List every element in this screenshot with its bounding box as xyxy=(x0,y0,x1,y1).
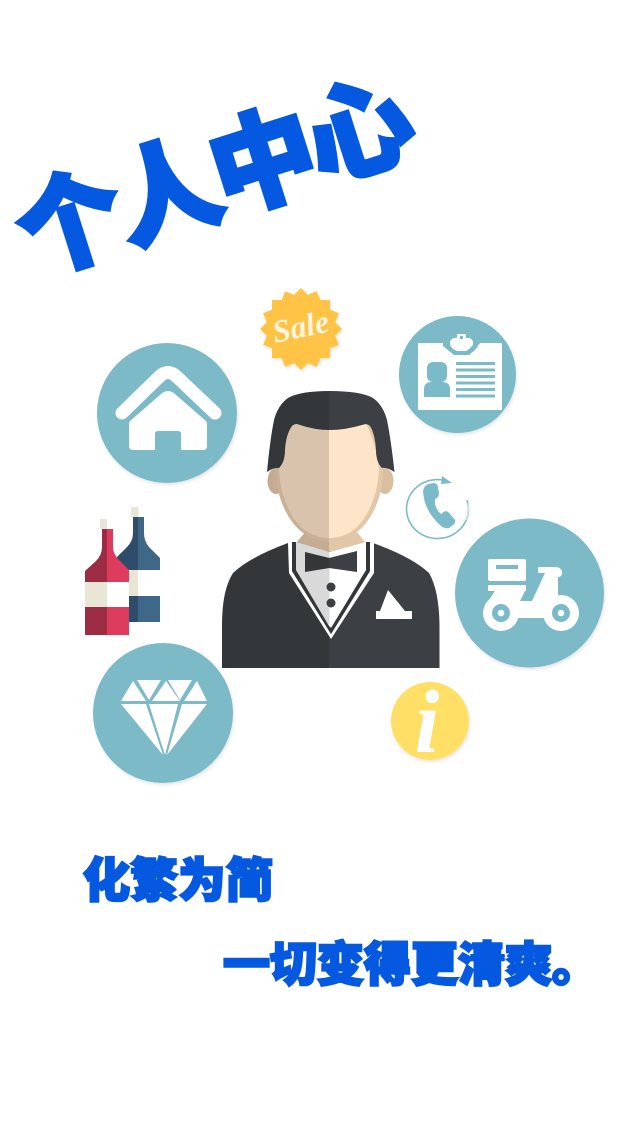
icon: home circle xyxy=(97,343,237,483)
bow tie xyxy=(305,551,357,572)
icon: id card circle xyxy=(399,316,516,433)
icon: wine bottles xyxy=(85,507,160,635)
icon: sale badge: Sale xyxy=(269,303,332,350)
icon: moped circle xyxy=(455,518,604,668)
figure: man in tuxedo xyxy=(222,391,440,668)
pocket square xyxy=(376,590,412,619)
blue bottle xyxy=(117,507,160,622)
icon: info circle: i xyxy=(414,673,440,772)
red bottle xyxy=(85,519,129,635)
shirt buttons xyxy=(326,582,336,608)
lapels and shirt xyxy=(288,542,374,639)
hair xyxy=(267,391,394,472)
icon: diamond circle xyxy=(93,643,233,783)
icon: info circle xyxy=(391,673,469,772)
ears xyxy=(268,468,394,494)
face xyxy=(276,425,383,541)
icon: sale badge xyxy=(260,288,342,370)
tagline line 1: 化繁为简 xyxy=(83,854,273,907)
jacket xyxy=(222,543,440,668)
icon: phone with ring arrow xyxy=(406,476,468,539)
neck xyxy=(296,530,366,552)
title: 个人中心 xyxy=(4,61,428,296)
tagline line 2: 一切变得更清爽。 xyxy=(223,938,599,991)
